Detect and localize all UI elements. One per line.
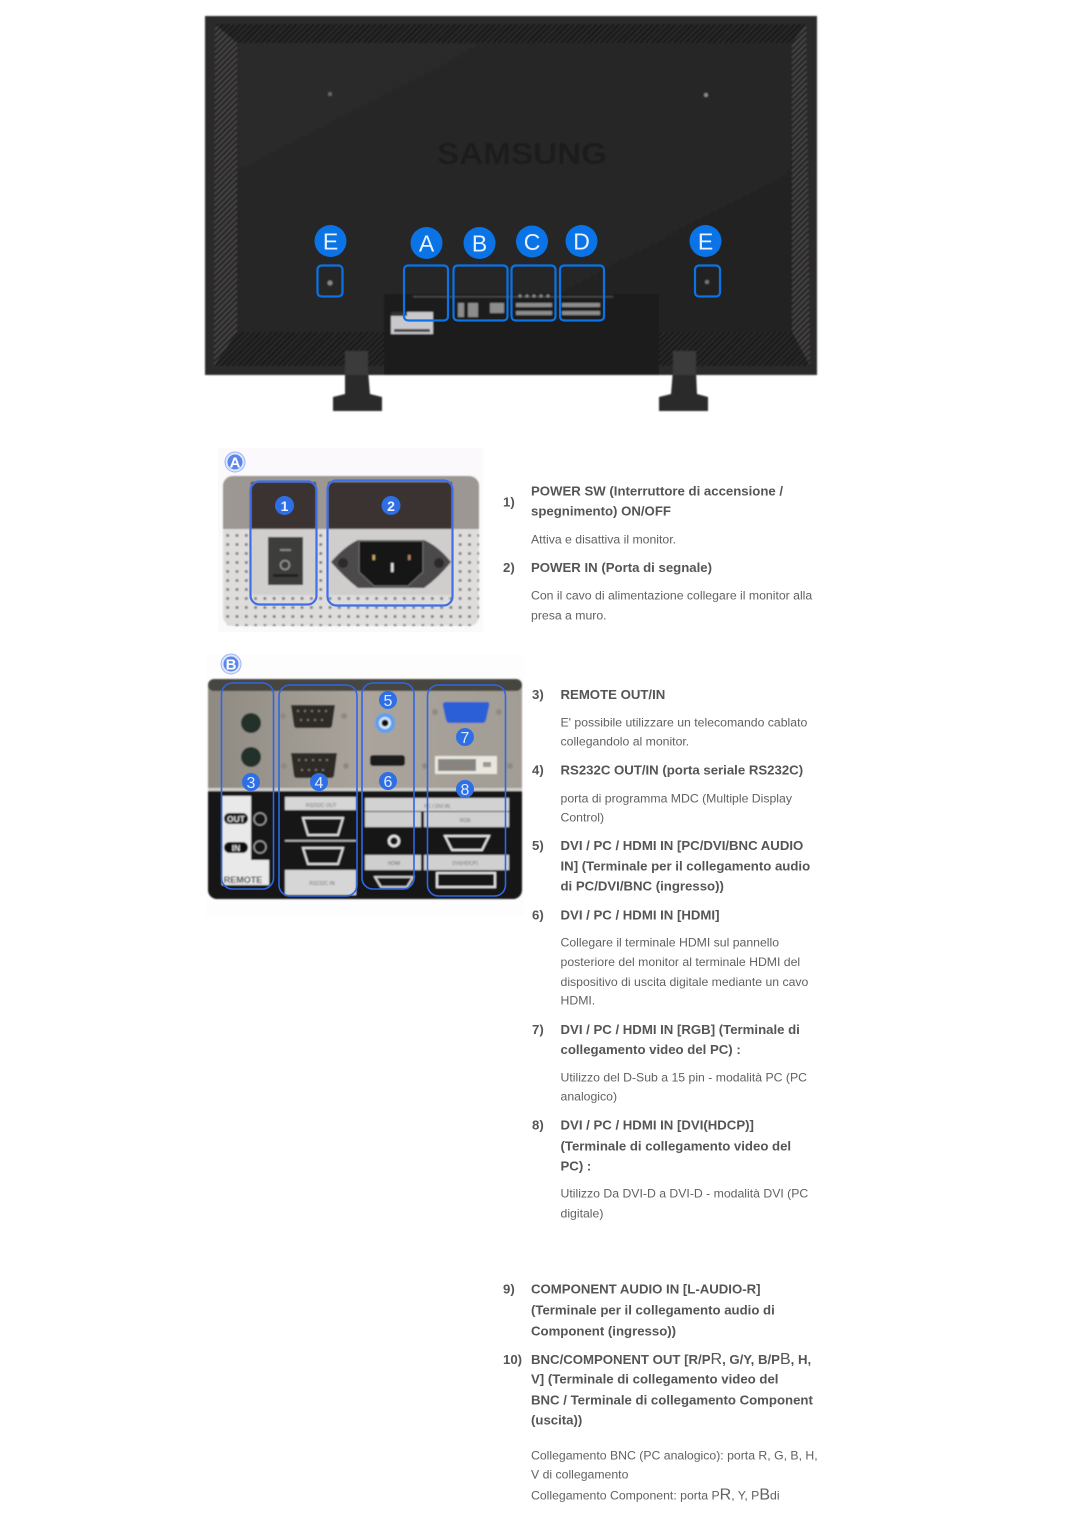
text block: items 3 to 8: E' possibile utilizzare un telecomando cablato [560, 716, 807, 730]
blue callouts A B C D E: E [698, 228, 713, 254]
panel B photo: connector panel [206, 654, 524, 916]
text block: items 3 to 8: (Terminale di collegamento video del [560, 1138, 791, 1154]
callout 1 [275, 496, 294, 515]
text block: items 3 to 8: posteriore del monitor al terminale HDMI del [560, 955, 800, 969]
blue callouts A B C D E: D [573, 228, 590, 254]
remote jacks [222, 713, 269, 885]
text block: items 1 and 2: presa a muro. [531, 608, 607, 622]
remote jacks: OUT [227, 814, 246, 824]
text block: items 1 and 2: 1) [503, 494, 515, 510]
blue callouts A B C D E [314, 225, 722, 320]
monitor rear photo [205, 16, 817, 411]
text block: items 3 to 8: Collegare il terminale HDMI sul pannello [560, 936, 779, 950]
panel A photo: power switch and socket [218, 448, 483, 632]
text block: items 1 and 2: 2) [503, 560, 515, 575]
audio and hdmi ports: PC / DVI IN [424, 804, 450, 810]
blue callouts A B C D E: A [419, 230, 435, 256]
text block: items 3 to 8: 5) [532, 838, 544, 853]
text block: items 3 to 8: Control) [560, 810, 604, 824]
text block: items 3 to 8: di PC/DVI/BNC (ingresso)) [560, 878, 724, 894]
blue callouts A B C D E: B [472, 230, 487, 256]
text block: items 9 and 10: BNC / Terminale di collegamento Component [531, 1392, 813, 1408]
text block: items 9 and 10 [503, 1282, 818, 1504]
text block: items 9 and 10: 9) [503, 1282, 515, 1296]
remote jacks: REMOTE [224, 875, 262, 885]
text block: items 3 to 8: Utilizzo del D-Sub a 15 pin - modalità PC (PC [560, 1070, 807, 1084]
label A: A [230, 454, 241, 472]
callouts 3 to 8 [242, 691, 474, 799]
label B: B [226, 656, 237, 674]
audio and hdmi ports [365, 713, 509, 887]
text block: items 3 to 8: porta di programma MDC (Multiple Display [560, 792, 793, 806]
text block: items 3 to 8: digitale) [560, 1206, 603, 1220]
callout 2 [382, 496, 400, 515]
text block: items 9 and 10: V] (Terminale di collegamento video del [531, 1372, 778, 1386]
text block: items 9 and 10: V di collegamento [531, 1468, 629, 1482]
callouts 3 to 8: 3 [247, 775, 256, 792]
text block: items 3 to 8: collegandolo al monitor. [560, 734, 689, 748]
remote jacks: IN [232, 843, 240, 853]
callouts 3 to 8: 6 [384, 774, 393, 791]
text block: items 1 and 2: POWER SW (Interruttore di accensione / [531, 484, 783, 498]
text block: items 3 to 8: PC) : [560, 1158, 591, 1174]
samsung logo: SAMSUNG [437, 136, 607, 171]
text block: items 3 to 8: RS232C OUT/IN (porta seriale RS232C) [560, 762, 803, 778]
text block: items 1 and 2 [503, 484, 812, 622]
power switch [268, 537, 303, 585]
text block: items 3 to 8: DVI / PC / HDMI IN [RGB] (Terminale di [560, 1022, 800, 1037]
text block: items 3 to 8: 7) [532, 1022, 544, 1037]
power socket [331, 540, 451, 588]
text block: items 3 to 8: 3) [532, 687, 544, 702]
blue callouts A B C D E: E [323, 228, 338, 254]
text block: items 3 to 8: 8) [532, 1118, 544, 1132]
RS232C ports: RS232C OUT [306, 803, 336, 809]
text block: items 3 to 8: DVI / PC / HDMI IN [PC/DVI/BNC AUDIO [560, 838, 803, 853]
text block: items 3 to 8: IN] (Terminale per il collegamento audio [560, 858, 810, 874]
RS232C ports [280, 705, 356, 895]
callouts 3 to 8: 4 [315, 775, 324, 792]
callouts 3 to 8: 7 [461, 730, 470, 747]
audio and hdmi ports: HDMI [388, 861, 400, 867]
label B [221, 654, 241, 674]
text block: items 1 and 2: POWER IN (Porta di segnale) [531, 560, 712, 575]
callouts 3 to 8: 8 [461, 782, 470, 799]
text block: items 3 to 8: analogico) [560, 1090, 617, 1104]
text block: items 1 and 2: spegnimento) ON/OFF [531, 504, 671, 518]
text block: items 9 and 10: Collegamento BNC (PC analogico): porta R, G, B, H, [531, 1448, 818, 1462]
text block: items 3 to 8: collegamento video del PC) : [560, 1042, 741, 1057]
RS232C ports: RS232C IN [309, 881, 335, 887]
text block: items 9 and 10: BNC/COMPONENT OUT [R/PR, G/Y, B/PB, H, [531, 1351, 811, 1368]
text block: items 3 to 8 [532, 687, 810, 1220]
monitor stands [333, 370, 708, 411]
text block: items 3 to 8: DVI / PC / HDMI IN [HDMI] [560, 908, 719, 922]
text block: items 3 to 8: Utilizzo Da DVI-D a DVI-D - modalità DVI (PC [560, 1186, 808, 1200]
text block: items 1 and 2: Attiva e disattiva il monitor. [531, 532, 676, 546]
callout 1: 1 [281, 498, 289, 514]
text block: items 9 and 10: COMPONENT AUDIO IN [L-AUDIO-R] [531, 1282, 761, 1296]
text block: items 1 and 2: Con il cavo di alimentazione collegare il monitor alla [531, 588, 812, 602]
audio and hdmi ports: RGB [460, 818, 471, 824]
text block: items 3 to 8: 4) [532, 762, 544, 778]
vga and dvi ports [422, 702, 513, 774]
text block: items 9 and 10: (uscita)) [531, 1412, 582, 1428]
text block: items 3 to 8: dispositivo di uscita digitale mediante un cavo [560, 975, 809, 989]
text block: items 9 and 10: (Terminale per il collegamento audio di [531, 1302, 775, 1318]
text block: items 9 and 10: Collegamento Component: porta PR, Y, PBdi [531, 1486, 780, 1504]
text block: items 3 to 8: HDMI. [560, 994, 595, 1008]
text block: items 3 to 8: DVI / PC / HDMI IN [DVI(HDCP)] [560, 1118, 754, 1132]
text block: items 9 and 10: 10) [503, 1352, 522, 1367]
callouts 3 to 8: 5 [384, 693, 393, 710]
label A [225, 452, 245, 472]
text block: items 3 to 8: REMOTE OUT/IN [560, 687, 665, 702]
text block: items 9 and 10: Component (ingresso)) [531, 1324, 676, 1338]
audio and hdmi ports: DVI(HDCP) [452, 861, 478, 867]
callout 2: 2 [387, 498, 395, 514]
text block: items 3 to 8: 6) [532, 908, 544, 922]
blue callouts A B C D E: C [524, 229, 540, 255]
